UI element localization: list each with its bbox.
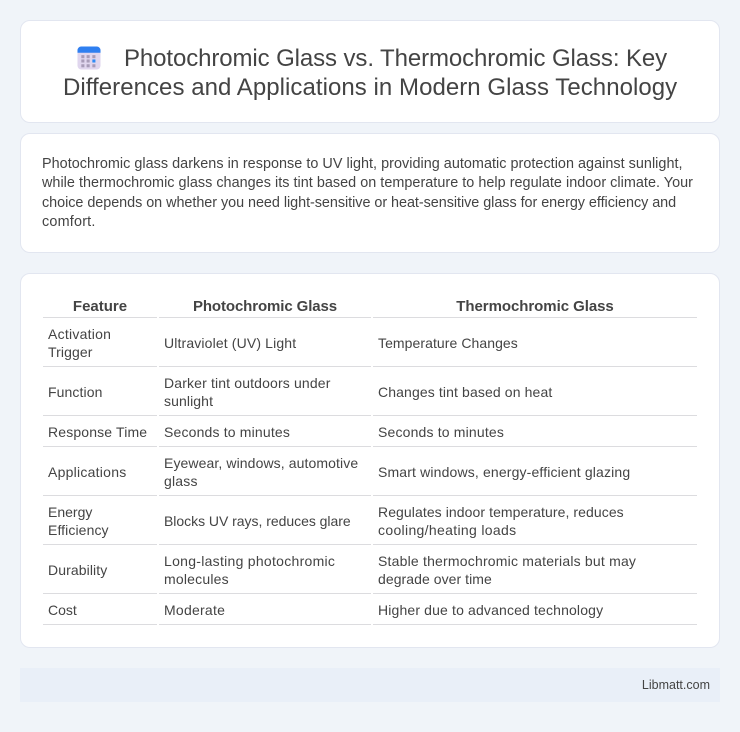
row: durability: Stable thermochromic materials but may: [378, 553, 636, 569]
footer credit: Libmatt.com: [642, 678, 710, 692]
row: applications: Applications: [48, 464, 126, 480]
row: cost: [43, 602, 697, 625]
row: energy efficiency: [43, 504, 697, 545]
row: durability: [43, 553, 697, 594]
intro text: [42, 156, 693, 230]
row: response time: Seconds to minutes: [164, 424, 290, 440]
row: applications: Eyewear, windows, automotive: [164, 455, 358, 471]
row: function: Darker tint outdoors under: [164, 375, 331, 391]
row: activation trigger: Trigger: [48, 344, 93, 360]
row: response time: Response Time: [48, 424, 147, 440]
table header: Thermochromic Glass: [456, 298, 614, 315]
row: activation trigger: Activation: [48, 326, 111, 342]
icon: calendar: [77, 46, 101, 70]
comparison table: [43, 298, 697, 625]
title: Differences and Applications in Modern Glass Technology: [63, 74, 677, 101]
row: energy efficiency: Regulates indoor temperature, reduces: [378, 504, 624, 520]
row: energy efficiency: cooling/heating loads: [378, 522, 516, 538]
row: response time: Seconds to minutes: [378, 424, 504, 440]
row: applications: Smart windows, energy-efficient glazing: [378, 464, 630, 480]
intro text: comfort.: [42, 214, 96, 230]
row: activation trigger: [43, 326, 697, 367]
row: cost: Higher due to advanced technology: [378, 602, 603, 618]
row: function: sunlight: [164, 393, 213, 409]
row: function: [43, 375, 697, 416]
title: [63, 45, 677, 101]
footer bar: [20, 668, 720, 702]
table header: Photochromic Glass: [193, 298, 337, 315]
row: durability: Long-lasting photochromic: [164, 553, 335, 569]
row: durability: molecules: [164, 571, 229, 587]
row: function: Function: [48, 384, 102, 400]
intro card: [20, 133, 720, 253]
row: cost: Cost: [48, 602, 77, 618]
header card: [20, 20, 720, 123]
row: durability: Durability: [48, 562, 107, 578]
intro text: Photochromic glass darkens in response to UV light, providing automatic protection against sunlight,: [42, 156, 683, 172]
row: response time: [43, 424, 697, 447]
table header: Feature: [73, 298, 127, 315]
intro text: choice depends on whether you need light-sensitive or heat-sensitive glass for energy efficiency and: [42, 195, 676, 211]
intro text: while thermochromic glass changes its tint based on temperature to help regulate indoor climate. Your: [42, 175, 693, 191]
title: Photochromic Glass vs. Thermochromic Glass: Key: [124, 45, 667, 72]
row: applications: glass: [164, 473, 198, 489]
row: energy efficiency: Blocks UV rays, reduces glare: [164, 513, 351, 529]
table header: [43, 298, 697, 318]
table card: [20, 273, 720, 648]
row: function: Changes tint based on heat: [378, 384, 552, 400]
row: durability: degrade over time: [378, 571, 492, 587]
row: applications: [43, 455, 697, 496]
row: energy efficiency: Energy: [48, 504, 92, 520]
row: energy efficiency: Efficiency: [48, 522, 109, 538]
row: activation trigger: Ultraviolet (UV) Light: [164, 335, 296, 351]
row: cost: Moderate: [164, 602, 225, 618]
row: activation trigger: Temperature Changes: [378, 335, 518, 351]
